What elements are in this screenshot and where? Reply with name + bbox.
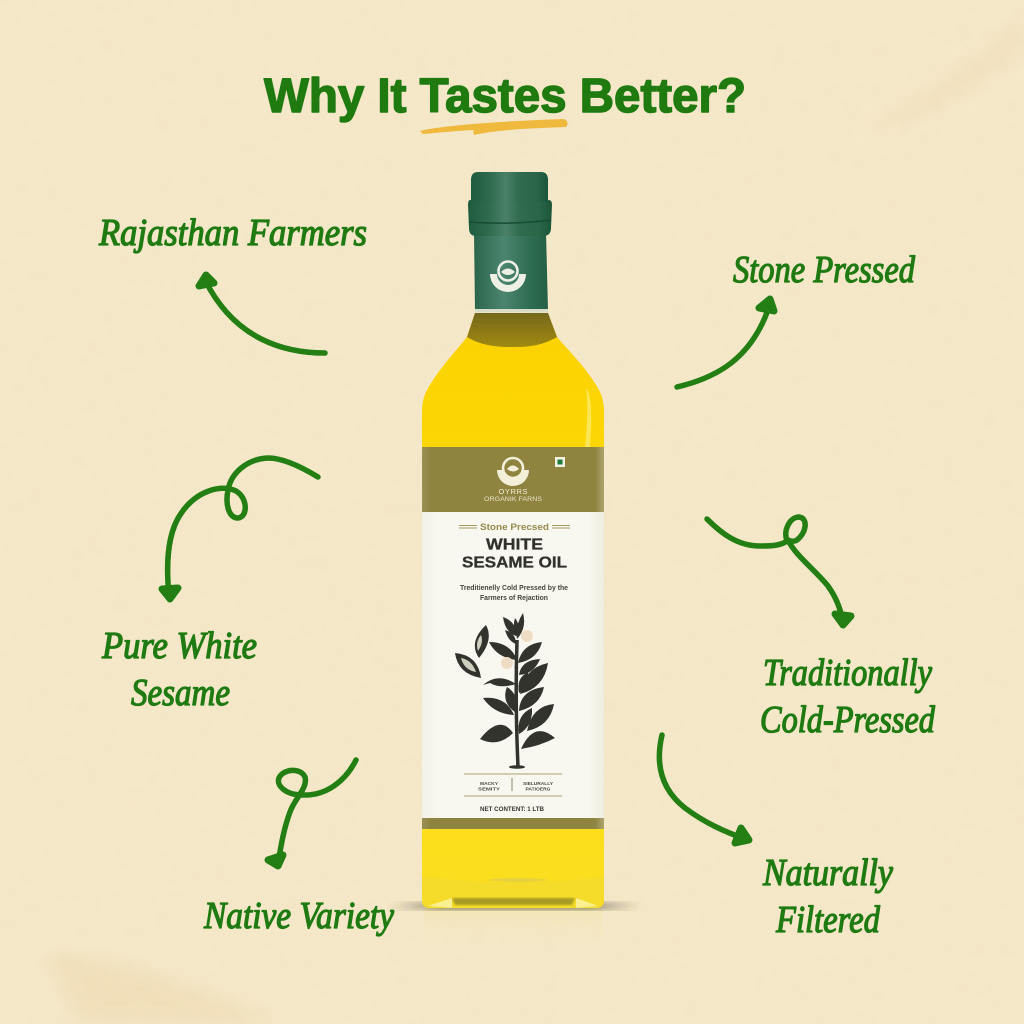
label feature box: MACKY <box>480 781 499 787</box>
label: Traditionally Cold-Pressed: Traditionally <box>763 652 932 694</box>
label: Pure White Sesame: Sesame <box>131 672 230 714</box>
neck logo <box>490 262 526 292</box>
brand subline: ORGANIK FARNS <box>484 497 542 503</box>
product name: WHITE <box>486 536 543 554</box>
net content: NET CONTENT: 1 LTB <box>480 806 545 813</box>
oil body <box>422 313 604 908</box>
label: Naturally Filtered: Filtered <box>775 899 881 941</box>
label feature box: SIELURALLY <box>523 781 554 787</box>
label: Pure White Sesame <box>101 625 257 714</box>
top label band <box>422 447 604 512</box>
label feature box: SEMITY <box>478 786 501 792</box>
title: Why It Tastes Better? <box>264 70 746 123</box>
bottom label band <box>422 818 604 829</box>
stone pressed tagline <box>459 522 570 533</box>
label feature box <box>464 774 562 796</box>
sesame plant illustration <box>455 613 555 769</box>
bottle base glass <box>422 876 604 908</box>
cap collar <box>468 200 552 236</box>
label: Traditionally Cold-Pressed <box>760 652 936 741</box>
product description: Farmers of Rejaction <box>480 593 548 602</box>
air gap in shoulder <box>467 313 557 347</box>
white label panel <box>422 512 604 818</box>
arrow: Stone Pressed <box>677 299 774 387</box>
cap shadow line <box>469 220 551 223</box>
product name <box>462 536 567 572</box>
bottle highlight <box>585 388 591 447</box>
arrow: Native Variety <box>268 760 356 866</box>
neck sleeve <box>474 232 548 311</box>
label: Naturally Filtered <box>762 852 893 941</box>
sleeve lower edge <box>475 309 548 312</box>
title underline stroke <box>420 119 568 135</box>
cap top <box>471 172 548 202</box>
arrow: Traditionally Cold-Pressed <box>707 517 851 625</box>
product name: SESAME OIL <box>462 554 567 572</box>
label: Pure White Sesame: Pure White <box>101 625 257 667</box>
brand name: OYRRS <box>498 487 528 496</box>
bottle ground shadow <box>390 902 640 910</box>
arrow: Naturally Filtered <box>659 735 749 843</box>
band logo <box>497 458 529 486</box>
product description: Treditienelly Cold Pressed by the <box>460 583 568 592</box>
stone pressed tagline: Stone Precsed <box>480 522 549 533</box>
label: Native Variety: Native Variety <box>203 895 394 937</box>
label: Stone Pressed: Stone Pressed <box>733 249 916 291</box>
bottle <box>422 172 604 908</box>
label feature box: PATIOERG <box>526 786 551 792</box>
arrow: Rajasthan Farmers <box>199 275 325 353</box>
bottle reflection <box>424 908 602 958</box>
product description <box>460 583 568 602</box>
veg mark <box>555 457 565 467</box>
label: Traditionally Cold-Pressed: Cold-Pressed <box>760 699 936 741</box>
label: Naturally Filtered: Naturally <box>762 852 893 894</box>
arrow: Pure White Sesame <box>162 458 318 599</box>
label: Rajasthan Farmers: Rajasthan Farmers <box>98 212 367 254</box>
